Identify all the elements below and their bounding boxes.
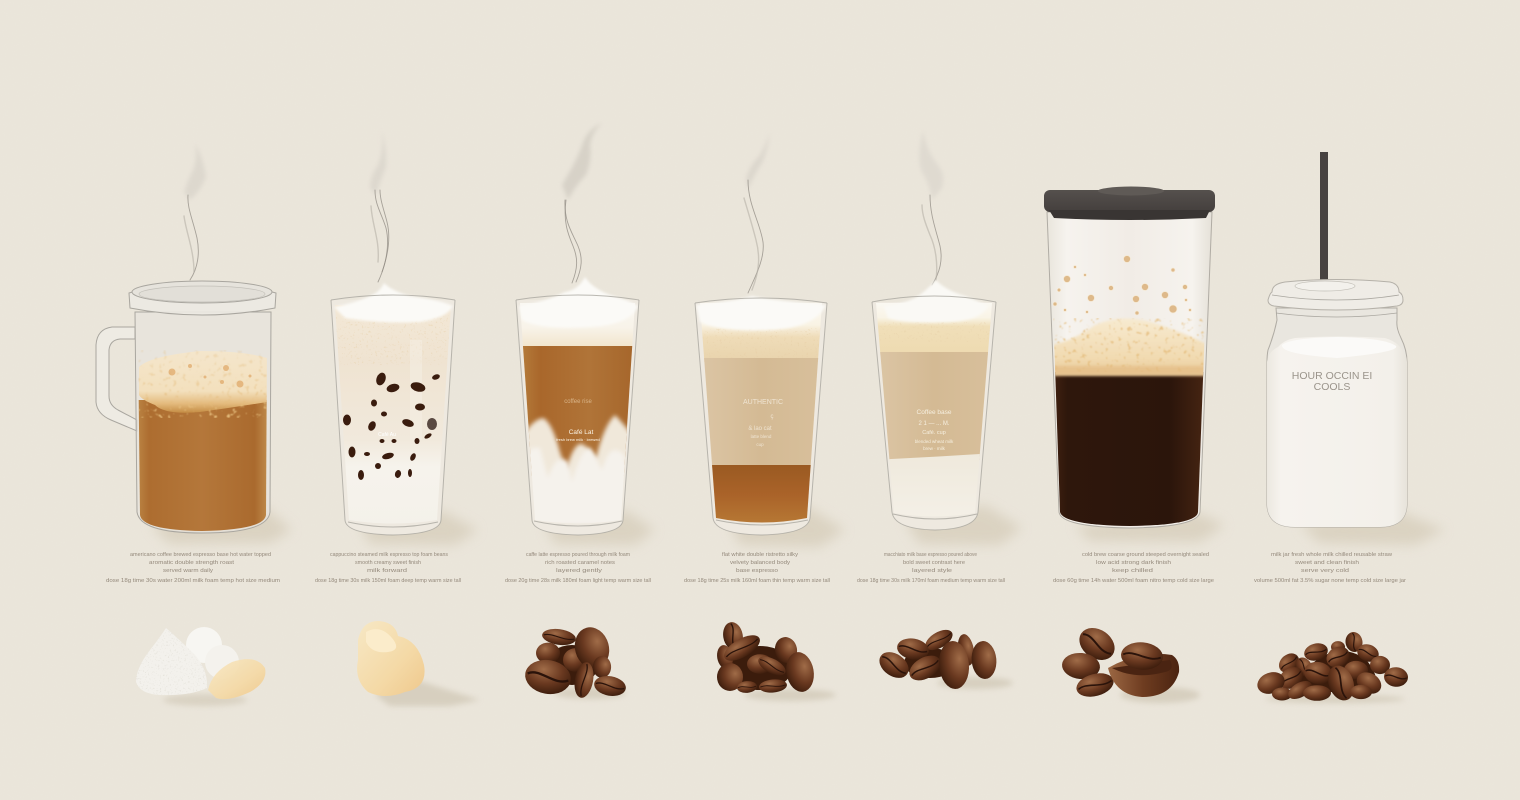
jar label: COOLS (1314, 381, 1350, 393)
caption 3: caffe latte espresso poured through milk foam (526, 552, 630, 558)
caption 7: sweet and clean finish (1295, 560, 1359, 566)
jar label (1292, 370, 1372, 393)
glass 4 labels (743, 399, 783, 447)
glass 3 foam (519, 277, 638, 328)
caption 4: velvety balanced body (730, 560, 790, 566)
caption 1: served warm daily (163, 568, 213, 574)
ingredient 4: bean cluster (715, 621, 836, 701)
drink 7: milk jar with straw (1267, 152, 1445, 545)
caption 2: dose 18g time 30s milk 150ml foam deep temp warm size tall (315, 578, 461, 584)
caption 2 (315, 552, 461, 584)
jar glass (1267, 308, 1407, 527)
glass 4 shadow (730, 505, 845, 547)
caption 2: smooth creamy sweet finish (355, 560, 421, 566)
caption 1: dose 18g time 30s water 200ml milk foam temp hot size medium (106, 578, 280, 584)
caption 7: volume 500ml fat 3.5% sugar none temp cold size large jar (1254, 578, 1406, 584)
drink 1: glass mug (96, 281, 292, 544)
glass 4 labels: & lao cat (748, 426, 772, 432)
caption 4: dose 18g time 25s milk 160ml foam thin temp warm size tall (684, 578, 830, 584)
caption 4: base espresso (736, 568, 778, 574)
glass 5 foam (884, 280, 988, 322)
caption 6: cold brew coarse ground steeped overnight sealed (1082, 552, 1209, 558)
caption 6: low acid strong dark finish (1096, 560, 1171, 566)
drink 6: lidded cold brew tumbler (1044, 186, 1225, 542)
ingredient 2: butter-like cream (357, 621, 480, 706)
mug handle (96, 327, 137, 431)
glass 2 label: Café Au (378, 432, 396, 438)
milk (1267, 336, 1407, 527)
glass 2 shadow (360, 510, 478, 545)
drink 3: layered caffe latte (516, 277, 655, 545)
glass 3 shadow (545, 510, 655, 545)
shell cup (1108, 654, 1179, 697)
caption 4 (684, 552, 830, 584)
caption 1: americano coffee brewed espresso base hot water topped (130, 552, 271, 558)
caption 3 (505, 552, 651, 584)
glass 4 foam (696, 296, 826, 330)
glass 2 fill (335, 305, 450, 524)
ingredient 7: bean pile (1254, 631, 1409, 704)
ingredient 3: bean cluster (522, 623, 627, 699)
ingredient 6: beans with cracked shell cup (1061, 621, 1200, 703)
caption 5: dose 18g time 30s milk 170ml foam medium temp warm size tall (857, 578, 1005, 584)
ingredient 1: whipped cream and slice (135, 627, 265, 706)
caption 5: bold sweet contrast here (903, 560, 965, 566)
tumbler coffee and foam (1048, 318, 1210, 528)
glass 5 labels: Coffee base (917, 409, 952, 416)
glass 3 labels: coffee rise (564, 399, 592, 405)
glass 5 labels: blended wheat milk (915, 439, 954, 444)
glass 2 beans (343, 371, 441, 480)
steam 5 (919, 130, 943, 285)
glass 5 labels: 2 1 — ... M. (918, 421, 950, 427)
glass 2 foam (334, 283, 453, 322)
caption 2: cappuccino steamed milk espresso top foam beans (330, 552, 448, 558)
caption 2: milk forward (367, 568, 407, 574)
mug shadow (150, 505, 292, 544)
caption 5 (857, 552, 1005, 584)
caption 3: rich roasted caramel notes (545, 560, 615, 566)
captions (106, 552, 1406, 584)
glass 5 labels: brew · milk (923, 446, 946, 451)
straw (1320, 152, 1328, 292)
mug rim (129, 282, 276, 315)
glass 4 labels: latte blend (751, 434, 772, 439)
caption 3: layered gently (556, 568, 602, 574)
glass 5 labels: Café. cup (922, 430, 946, 436)
glass 4 fill (695, 300, 827, 525)
tumbler lid (1044, 190, 1215, 212)
caption 5: layered style (912, 568, 952, 574)
ingredient 5: bean cluster (875, 626, 1013, 690)
glass 5 labels (915, 409, 954, 451)
caption 6: dose 60g time 14h water 500ml foam nitro temp cold size large (1053, 578, 1214, 584)
tumbler bubbles (1053, 256, 1192, 315)
caption 1: aromatic double strength roast (149, 560, 235, 566)
caption 4: flat white double ristretto silky (722, 552, 798, 558)
tumbler body (1047, 212, 1212, 528)
caption 6 (1053, 552, 1214, 584)
steam wisps (184, 123, 943, 293)
caption 7: serve very cold (1301, 568, 1349, 574)
drink 3: layered caffe latte: Café Lat (569, 429, 593, 436)
steam 1 (184, 143, 206, 280)
jar shadow (1300, 510, 1445, 545)
caption 6: keep chilled (1112, 568, 1153, 574)
glass 3 fill (520, 303, 635, 523)
steam 4 (744, 132, 770, 293)
glass 5 fill (876, 303, 992, 460)
steam 2 (370, 130, 389, 282)
glass 5 shadow (905, 505, 1022, 545)
tumbler shadow (1075, 512, 1225, 542)
drink 2: latte with beans (330, 283, 478, 545)
mug coffee and foam (136, 350, 268, 535)
jar label: HOUR OCCIN EI (1292, 370, 1372, 382)
glass 4 labels: AUTHENTIC (743, 399, 783, 406)
caption 1 (106, 552, 280, 584)
caption 5: macchiato milk base espresso poured above (884, 552, 977, 558)
caption 7: milk jar fresh whole milk chilled reusable straw (1271, 552, 1392, 558)
caption 7 (1254, 552, 1406, 584)
drink 3: layered caffe latte: fresh brew milk · brewed (556, 437, 600, 442)
drink 4: coffee base latte (695, 296, 845, 547)
glass 4 labels: ç (770, 414, 774, 420)
steam 3 (562, 123, 602, 283)
drink 5: milk-base latte (872, 280, 1022, 545)
jar lid (1268, 280, 1403, 310)
caption 3: dose 20g time 28s milk 180ml foam light temp warm size tall (505, 578, 651, 584)
glass 4 labels: cup (756, 442, 764, 447)
